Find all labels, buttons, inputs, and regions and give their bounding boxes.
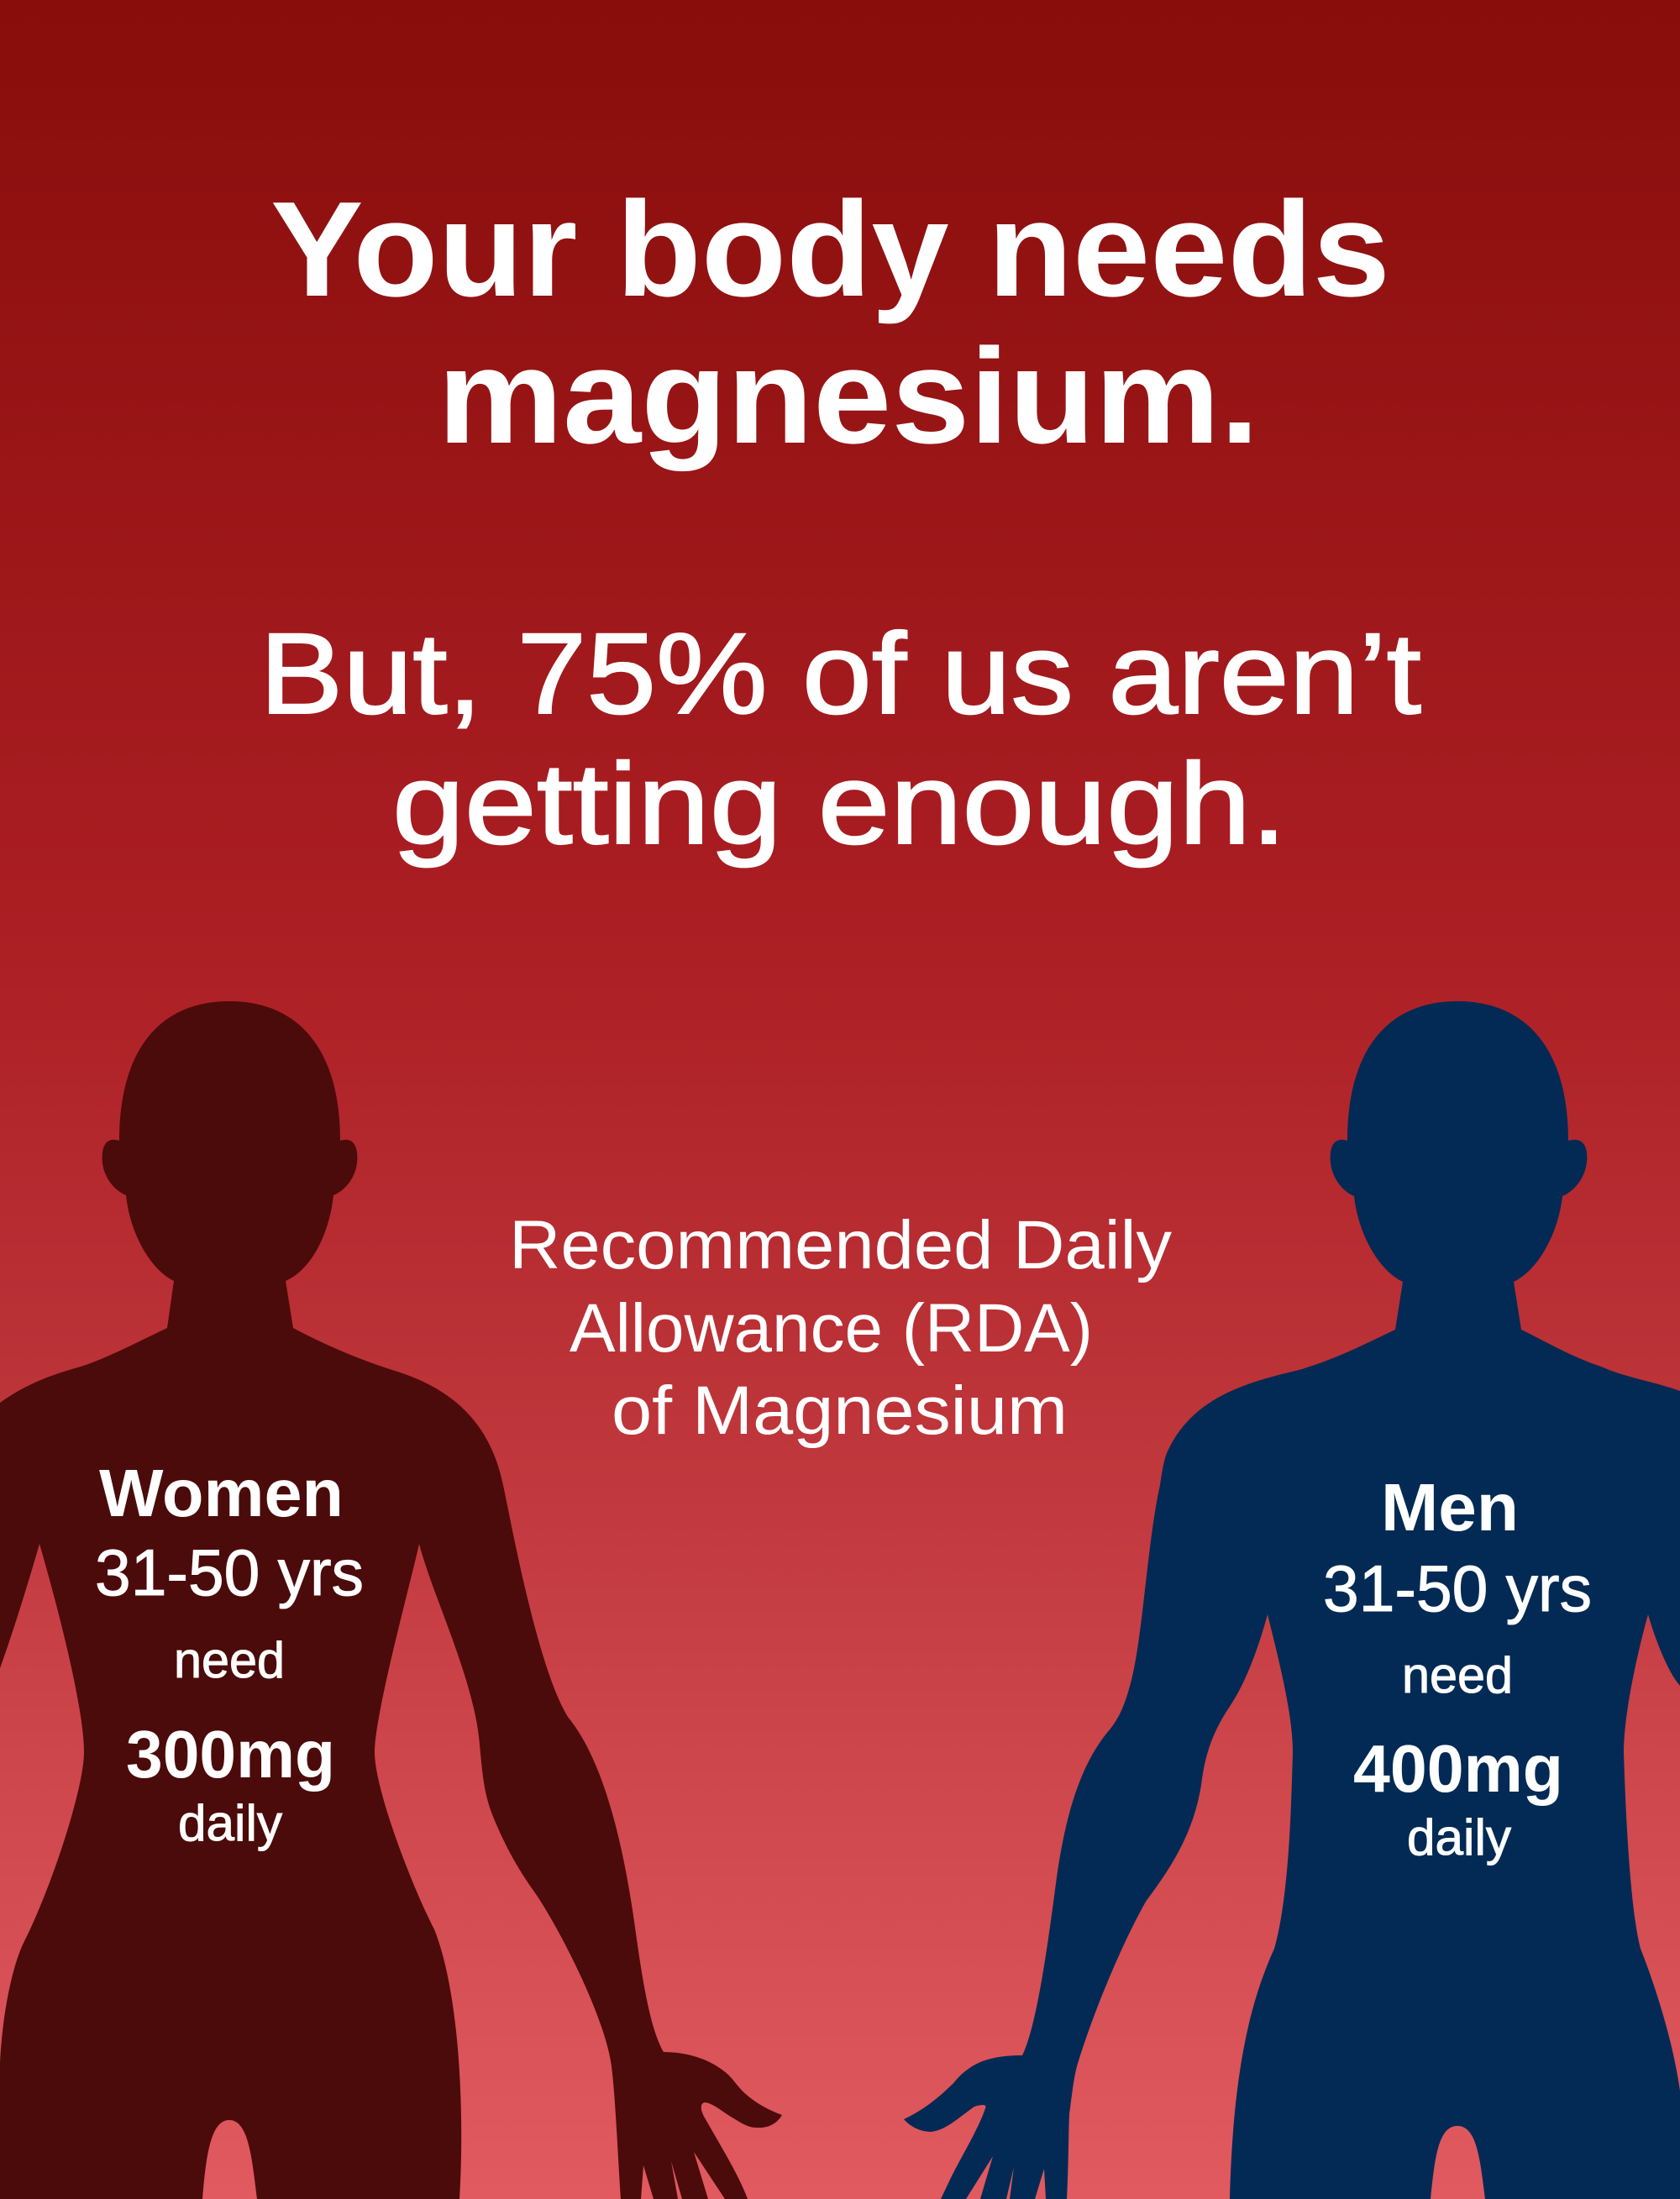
panel: women silhouette with text	[0, 1001, 782, 2199]
label: women 31-50 yrs: 300mg	[126, 1717, 335, 1792]
title: your body needs magnesium: magnesium.	[438, 321, 1259, 472]
panel: men silhouette with text	[904, 1001, 1680, 2199]
title: your body needs magnesium: Your body needs	[270, 174, 1390, 325]
label: men 31-50 yrs: need	[1402, 1647, 1513, 1703]
RDA heading: of Magnesium	[612, 1372, 1068, 1449]
label: women 31-50 yrs	[95, 1456, 364, 1851]
label: men 31-50 yrs: daily	[1407, 1809, 1511, 1866]
label: men 31-50 yrs: Men	[1381, 1470, 1519, 1545]
subtitle: 75% not getting enough: getting enough.	[392, 740, 1287, 869]
RDA heading	[509, 1207, 1172, 1449]
label: women 31-50 yrs: need	[174, 1632, 285, 1688]
subtitle: 75% not getting enough: But, 75% of us aren’t	[260, 610, 1421, 738]
label: women 31-50 yrs: daily	[178, 1795, 282, 1851]
icon: woman body silhouette	[0, 1001, 782, 2199]
RDA heading: Allowance (RDA)	[570, 1290, 1093, 1367]
label: men 31-50 yrs: 31-50 yrs	[1323, 1551, 1592, 1625]
RDA heading: Recommended Daily	[509, 1207, 1172, 1283]
icon: man body silhouette	[904, 1001, 1680, 2199]
subtitle: 75% not getting enough	[260, 610, 1421, 869]
label: women 31-50 yrs: Women	[99, 1456, 344, 1530]
label: women 31-50 yrs: 31-50 yrs	[95, 1535, 364, 1609]
label: men 31-50 yrs	[1323, 1470, 1592, 1866]
title: your body needs magnesium	[270, 174, 1390, 472]
label: men 31-50 yrs: 400mg	[1353, 1731, 1563, 1806]
